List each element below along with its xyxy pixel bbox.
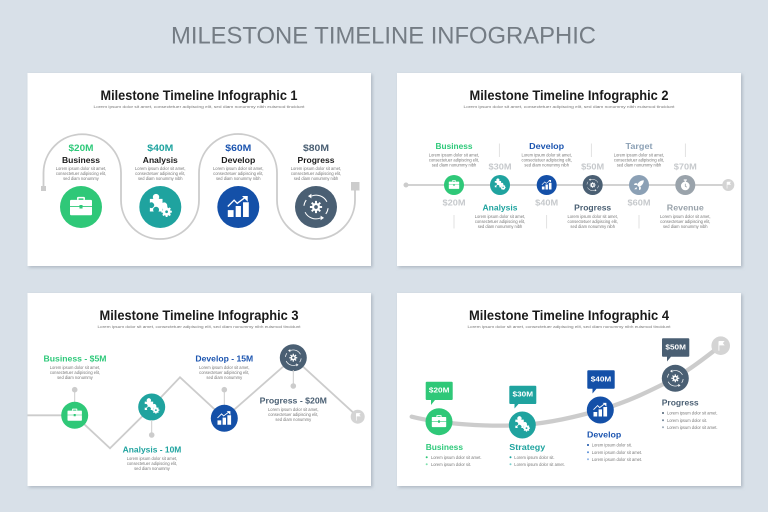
step: progress: Lorem ipsum dolor sit amet, xyxy=(567,214,618,219)
milestone: analysis: Analysis xyxy=(143,155,178,165)
step: business: $20M xyxy=(429,388,450,394)
milestone: progress: $80M xyxy=(303,143,329,154)
step: progress: consectetuer adipiscing elit, xyxy=(568,219,618,224)
step: develop xyxy=(587,370,642,462)
end flag marker xyxy=(351,182,360,190)
milestone: business: Lorem ipsum dolor sit amet, xyxy=(56,166,106,171)
step: analysis: Lorem ipsum dolor sit amet, xyxy=(475,214,525,219)
zigzag timeline xyxy=(28,358,358,448)
step: progress xyxy=(662,338,718,430)
step: strategy xyxy=(509,386,565,467)
heading 2: Milestone Timeline Infographic 2 xyxy=(470,87,669,103)
step: strategy: Lorem ipsum dolor sit. xyxy=(514,455,555,460)
step: target: consectetuer adipiscing elit, xyxy=(614,158,664,162)
milestone: develop xyxy=(213,143,264,228)
step: progress: Progress xyxy=(662,398,699,408)
step: business: Lorem ipsum dolor sit amet, xyxy=(429,152,479,158)
step: develop: $40M xyxy=(591,376,611,384)
step: develop: Lorem ipsum dolor sit. xyxy=(592,442,632,448)
main title: MILESTONE TIMELINE INFOGRAPHIC xyxy=(171,22,596,50)
end flag marker xyxy=(711,336,730,355)
milestone: progress xyxy=(291,143,341,228)
milestone: analysis: consectetuer adipiscing elit, xyxy=(135,171,185,176)
step: analysis: Analysis - 10M xyxy=(123,444,181,454)
end flag marker xyxy=(722,179,734,191)
step: develop: Develop xyxy=(529,141,564,151)
step: progress xyxy=(260,344,327,422)
step: develop xyxy=(521,141,572,208)
milestone: progress: Progress xyxy=(298,155,335,165)
step: business: Business xyxy=(436,141,473,151)
step: develop: Lorem ipsum dolor sit amet. xyxy=(592,457,642,462)
milestone: develop: Lorem ipsum dolor sit amet, xyxy=(213,166,264,171)
step: strategy: Strategy xyxy=(509,442,546,452)
milestone: progress: consectetuer adipiscing elit, xyxy=(291,171,341,176)
step: analysis: sed diam nonummy xyxy=(134,466,171,471)
step: revenue xyxy=(660,161,711,229)
subtitle 1: Lorem ipsum dolor sit amet, consectetuer adipiscing elit, sed diam nonummy nibh euismod tincidunt xyxy=(94,104,306,109)
step: develop: Develop - 15M xyxy=(195,354,253,364)
step: progress: consectetuer adipiscing elit, xyxy=(268,412,318,417)
step: progress: Lorem ipsum dolor sit. xyxy=(667,418,707,423)
milestone: analysis: $40M xyxy=(147,143,173,154)
heading 4: Milestone Timeline Infographic 4 xyxy=(469,307,669,323)
step: analysis: $30M xyxy=(488,161,512,171)
step: develop: consectetuer adipiscing elit, xyxy=(522,158,572,162)
milestone: business: Business xyxy=(62,155,100,165)
milestone: business: sed diam nonummy xyxy=(63,176,100,181)
step: revenue: Revenue xyxy=(667,203,704,213)
panel: infographic 1 xyxy=(28,73,371,266)
step: develop: sed diam nonummy xyxy=(206,375,243,380)
milestone: develop: sed diam nonummy nibh xyxy=(216,176,261,181)
step: progress: Lorem ipsum dolor sit amet, xyxy=(268,407,319,412)
step: business: Business - $5M xyxy=(44,354,106,364)
step: business: Lorem ipsum dolor sit. xyxy=(431,462,471,467)
horizontal timeline line xyxy=(406,184,728,186)
step: strategy: $30M xyxy=(513,392,533,398)
end flag marker xyxy=(351,410,365,424)
step: develop: $40M xyxy=(535,198,558,208)
step: business: Lorem ipsum dolor sit amet. xyxy=(431,455,482,460)
milestone: analysis: Lorem ipsum dolor sit amet, xyxy=(135,166,186,171)
step: progress: Progress - $20M xyxy=(260,395,327,405)
step: analysis: consectetuer adipiscing elit, xyxy=(475,219,525,224)
step: analysis: consectetuer adipiscing elit, xyxy=(127,461,177,466)
step: business: sed diam nonummy nibh xyxy=(432,162,477,168)
step: develop: Lorem ipsum dolor sit amet. xyxy=(592,450,642,455)
panel: infographic 2 xyxy=(397,73,741,266)
step: business xyxy=(44,354,106,429)
heading 1: Milestone Timeline Infographic 1 xyxy=(100,87,298,103)
start dot xyxy=(404,182,408,188)
step: develop: sed diam nonummy nibh xyxy=(524,162,570,168)
milestone: progress: sed diam nonummy nibh xyxy=(294,176,339,181)
step: progress: sed diam nonummy xyxy=(275,417,312,422)
subtitle 3: Lorem ipsum dolor sit amet, consectetuer adipiscing elit, sed diam nonummy nibh euismod tincidunt xyxy=(98,324,302,329)
step: target: Lorem ipsum dolor sit amet, xyxy=(614,152,664,158)
step: strategy: Lorem ipsum dolor sit amet. xyxy=(514,462,565,467)
milestone: analysis xyxy=(135,143,186,228)
start marker xyxy=(41,186,46,191)
step: analysis: Lorem ipsum dolor sit amet, xyxy=(127,456,177,461)
step: develop: Lorem ipsum dolor sit amet, xyxy=(521,152,572,158)
milestone: develop: Develop xyxy=(221,155,255,165)
step: business: $20M xyxy=(442,198,466,208)
step: progress: $50M xyxy=(581,161,604,171)
milestone: progress: Lorem ipsum dolor sit amet, xyxy=(291,166,341,171)
step: business xyxy=(429,141,479,208)
step: revenue: consectetuer adipiscing elit, xyxy=(660,219,710,224)
step: target xyxy=(614,141,664,208)
step: progress: $50M xyxy=(665,344,686,352)
winding timeline path xyxy=(44,134,355,239)
milestone: develop: $60M xyxy=(225,143,251,154)
step: progress: Lorem ipsum dolor sit amet. xyxy=(667,425,718,430)
subtitle 2: Lorem ipsum dolor sit amet, consectetuer adipiscing elit, sed diam nonummy nibh euismod tincidunt xyxy=(464,104,676,109)
step: target: Target xyxy=(626,141,653,151)
step: revenue: Lorem ipsum dolor sit amet, xyxy=(660,214,711,219)
rising curve timeline xyxy=(412,346,721,426)
step: progress xyxy=(567,161,618,229)
step: analysis xyxy=(123,394,181,471)
milestone: business: $20M xyxy=(68,143,94,154)
milestone: develop: consectetuer adipiscing elit, xyxy=(213,171,263,176)
panel: infographic 4 xyxy=(397,293,741,486)
step: analysis: Analysis xyxy=(482,203,518,213)
step: develop xyxy=(195,354,253,432)
step: revenue: sed diam nonummy nibh xyxy=(663,224,708,229)
step: analysis: sed diam nonummy nibh xyxy=(478,224,523,229)
step: business: Business xyxy=(426,442,463,452)
step: business: Lorem ipsum dolor sit amet, xyxy=(50,365,100,370)
step: progress: Lorem ipsum dolor sit amet. xyxy=(667,410,718,416)
step: develop: Develop xyxy=(587,430,621,440)
step: progress: Progress xyxy=(574,203,611,213)
step: develop: consectetuer adipiscing elit, xyxy=(199,370,249,375)
step: analysis xyxy=(475,161,525,229)
heading 3: Milestone Timeline Infographic 3 xyxy=(100,307,299,323)
step: business: consectetuer adipiscing elit, xyxy=(429,158,479,162)
milestone: business xyxy=(56,143,106,228)
step: business: consectetuer adipiscing elit, xyxy=(50,370,100,375)
step: target: $60M xyxy=(628,198,650,208)
step: develop: Lorem ipsum dolor sit amet, xyxy=(199,365,250,370)
panel: infographic 3 xyxy=(28,293,371,486)
step: progress: sed diam nonummy nibh xyxy=(570,224,616,229)
milestone: business: consectetuer adipiscing elit, xyxy=(56,171,106,176)
step: business: sed diam nonummy xyxy=(57,375,94,380)
milestone: analysis: sed diam nonummy nibh xyxy=(138,176,183,181)
tick marks xyxy=(454,144,685,228)
subtitle 4: Lorem ipsum dolor sit amet, consectetuer adipiscing elit, sed diam nonummy nibh euismod tincidunt xyxy=(468,324,672,329)
step: business xyxy=(426,382,482,467)
step: target: sed diam nonummy nibh xyxy=(617,162,662,168)
step: revenue: $70M xyxy=(674,161,697,171)
